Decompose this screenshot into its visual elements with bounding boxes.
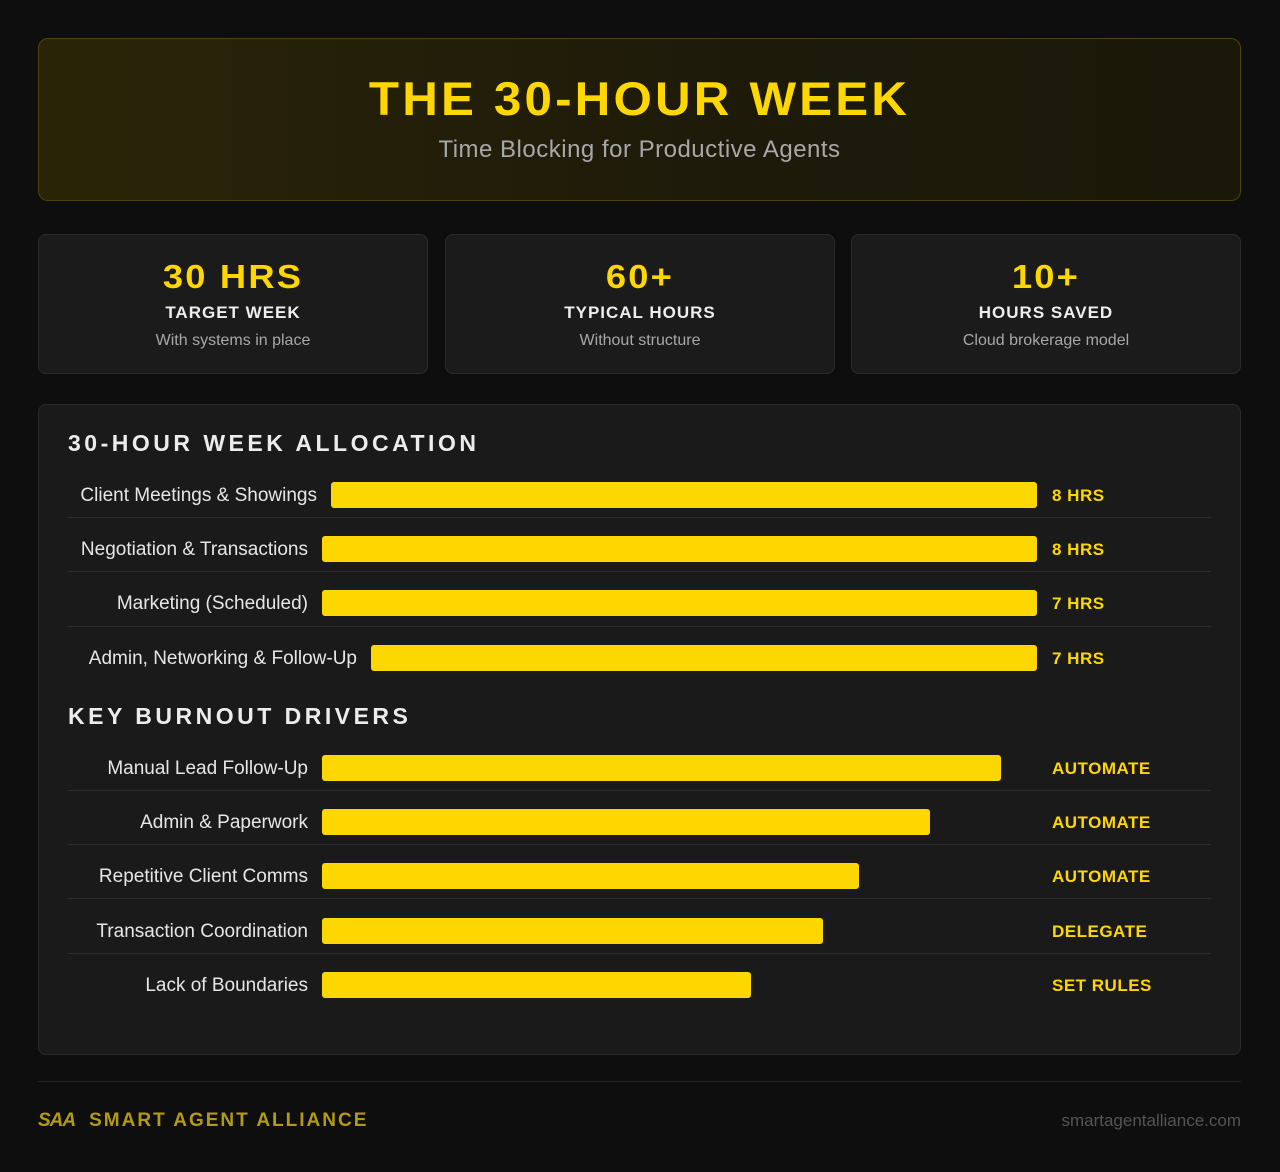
burnout drivers bar chart: DELEGATE [1052,922,1147,941]
subtitle: Time Blocking for Productive Agents [438,136,841,163]
allocation bar chart: Client Meetings & Showings [80,485,317,506]
burnout drivers bar chart: SET RULES [1052,976,1152,995]
burnout drivers bar chart: Lack of Boundaries [145,975,308,996]
title: THE 30-HOUR WEEK [369,72,910,125]
header banner [38,38,1241,201]
stat card: 60+: Without structure [580,332,700,349]
stat card: 10+: Cloud brokerage model [963,332,1129,349]
stat card: 30 hrs: TARGET WEEK [165,303,301,322]
panel: charts [38,404,1241,1055]
stat card: 60+ [445,234,835,374]
stat card: 60+: TYPICAL HOURS [564,303,716,322]
allocation bar chart: Admin, Networking & Follow-Up [89,648,357,669]
burnout drivers bar chart [96,755,1152,998]
stat card: 60+: 60+ [606,258,674,295]
allocation bar chart [80,482,1105,671]
stat card: 30 hrs: With systems in place [156,332,310,349]
burnout drivers bar chart: AUTOMATE [1052,867,1151,886]
burnout drivers bar chart: Admin & Paperwork [140,812,308,833]
allocation bar chart: Marketing (Scheduled) [117,593,308,614]
footer url: smartagentalliance.com [1061,1111,1241,1130]
burnout drivers bar chart: AUTOMATE [1052,813,1151,832]
allocation bar chart: Negotiation & Transactions [81,539,308,560]
allocation bar chart: 7 HRS [1052,649,1105,668]
burnout drivers bar chart: AUTOMATE [1052,759,1151,778]
footer logo: SAA SMART AGENT ALLIANCE [38,1110,368,1131]
stat card: 30 hrs: 30 HRS [163,258,303,295]
heading: burnout drivers: KEY BURNOUT DRIVERS [68,703,411,729]
heading: allocation: 30-HOUR WEEK ALLOCATION [68,430,479,456]
stat card: 10+: HOURS SAVED [979,303,1113,322]
burnout drivers bar chart: Manual Lead Follow-Up [107,758,308,779]
allocation bar chart: 7 HRS [1052,594,1105,613]
burnout drivers bar chart: Repetitive Client Comms [99,866,308,887]
allocation bar chart: 8 HRS [1052,486,1105,505]
burnout drivers bar chart: Transaction Coordination [96,921,308,942]
stat card: 30 hrs [38,234,428,374]
stat card: 10+ [851,234,1241,374]
stat card: 10+: 10+ [1012,258,1080,295]
allocation bar chart: 8 HRS [1052,540,1105,559]
